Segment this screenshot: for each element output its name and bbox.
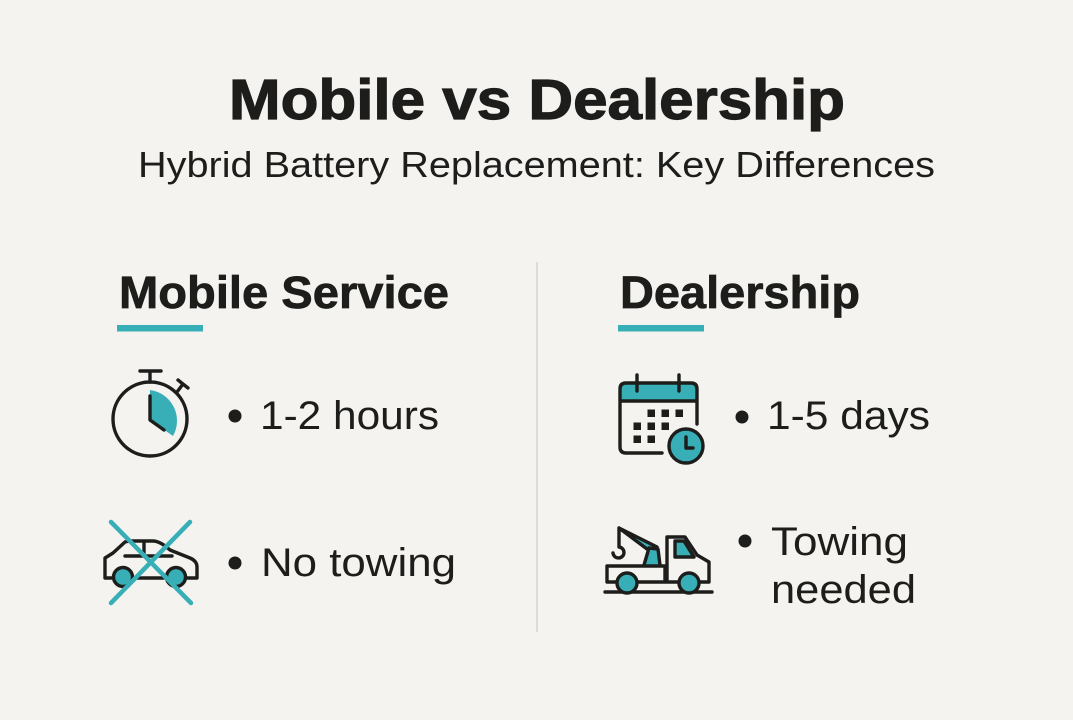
item: 1-5 days: 1-5 days (767, 394, 930, 438)
icon: crossed-out car (105, 522, 197, 603)
panel: mobile service (105, 267, 456, 603)
item: towing needed: Towing (771, 520, 908, 564)
item: no towing: No towing (261, 541, 456, 585)
icon: tow truck (605, 528, 712, 593)
icon: calendar with clock (620, 375, 703, 463)
heading: dealership: Dealership (620, 267, 860, 318)
icon: stopwatch (113, 371, 188, 456)
item: towing needed (738, 520, 916, 612)
title: Mobile vs Dealership (229, 68, 845, 132)
heading: mobile service: Mobile Service (119, 267, 449, 318)
item: towing needed: needed (771, 568, 916, 612)
subtitle: Hybrid Battery Replacement: Key Differences (138, 144, 935, 185)
item: 1-2 hours: 1-2 hours (260, 394, 439, 438)
panel: dealership (605, 267, 930, 612)
